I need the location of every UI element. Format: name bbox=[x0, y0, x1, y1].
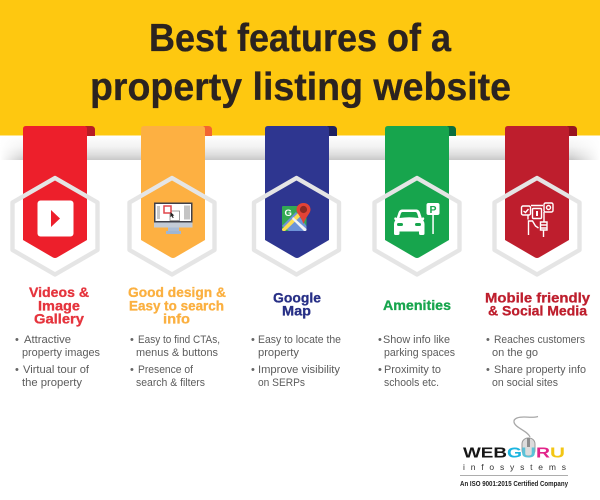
heading: videos: Image bbox=[38, 298, 80, 314]
bullet list: videos: property images bbox=[22, 347, 100, 359]
bullet list: google map: • bbox=[251, 364, 255, 376]
bullet list: good design: search & filters bbox=[136, 377, 205, 389]
ribbon: red bbox=[23, 126, 95, 258]
hexagon outline bbox=[254, 178, 339, 274]
bullet list: google map: property bbox=[258, 347, 300, 359]
panel: videos and image gallery bbox=[12, 126, 100, 389]
bullet list: google map: Easy to locate the bbox=[258, 334, 341, 346]
hexagon outline bbox=[374, 178, 460, 274]
wordmark: R bbox=[536, 444, 550, 462]
heading: amenities: Amenities bbox=[383, 297, 451, 313]
bullet list: amenities: • bbox=[378, 334, 382, 346]
bullet list: google map: • bbox=[251, 334, 255, 346]
icon: video play bbox=[38, 200, 74, 236]
bullet list: mobile friendly: Reaches customers bbox=[494, 334, 585, 346]
bullet list: mobile friendly: Share property info bbox=[494, 364, 586, 376]
heading: mobile friendly bbox=[485, 290, 590, 318]
panel: good design and easy search bbox=[128, 126, 226, 389]
bullet list: good design: • bbox=[130, 364, 134, 376]
tagline: infosystems bbox=[463, 462, 566, 472]
bullet list: videos: the property bbox=[22, 377, 83, 389]
bullet list: mobile friendly: on the go bbox=[492, 347, 538, 359]
bullet list: good design: Presence of bbox=[138, 364, 194, 376]
bullet list: google map bbox=[251, 334, 341, 389]
title bbox=[90, 17, 511, 109]
heading: videos: Gallery bbox=[34, 310, 84, 326]
heading: good design: Good design & bbox=[128, 284, 226, 300]
heading: good design: Easy to search bbox=[129, 298, 224, 314]
bullet list: amenities: Show info like bbox=[383, 334, 450, 346]
panel: google map bbox=[251, 126, 341, 389]
header band bbox=[0, 0, 600, 160]
bullet list: amenities: Proximity to bbox=[384, 364, 441, 376]
bullet list: videos bbox=[15, 334, 100, 389]
icon: computer mouse bbox=[514, 416, 538, 456]
ribbon: crimson bbox=[505, 126, 577, 258]
panel: amenities bbox=[374, 126, 460, 389]
icon: car and parking sign bbox=[394, 203, 440, 235]
ribbon: green bbox=[385, 126, 456, 258]
bullet list: google map: Improve visibility bbox=[258, 364, 341, 376]
certification note: An ISO 9001:2015 Certified Company bbox=[460, 479, 569, 488]
heading: videos: Videos & bbox=[29, 284, 89, 300]
bullet list: mobile friendly bbox=[486, 334, 586, 389]
heading: good design bbox=[128, 284, 226, 326]
bullet list: mobile friendly: on social sites bbox=[492, 377, 558, 389]
icon: google maps: G bbox=[284, 208, 292, 219]
heading: good design: info bbox=[163, 310, 190, 326]
bullet list: mobile friendly: • bbox=[486, 334, 490, 346]
heading: google map: Google bbox=[273, 290, 321, 306]
bullet list: amenities: • bbox=[378, 364, 382, 376]
bullet list: videos: • bbox=[15, 334, 19, 346]
wordmark: U bbox=[550, 444, 565, 462]
bullet list: videos: • bbox=[15, 364, 19, 376]
ribbon: blue bbox=[265, 126, 337, 258]
title: property listing website bbox=[90, 66, 511, 109]
hexagon outline bbox=[130, 178, 214, 274]
heading: google map bbox=[273, 290, 321, 318]
wordmark: U bbox=[521, 444, 536, 462]
bullet list: good design: Easy to find CTAs, bbox=[138, 334, 220, 346]
icon: car and parking sign: P bbox=[430, 204, 437, 216]
bullet list: good design bbox=[130, 334, 220, 389]
bullet list: videos: Virtual tour of bbox=[23, 364, 90, 376]
icon: hand holding phone with social icons bbox=[522, 203, 553, 237]
heading: google map: Map bbox=[282, 302, 311, 318]
heading: mobile friendly: Mobile friendly bbox=[485, 290, 590, 306]
panel: mobile friendly and social media bbox=[485, 126, 590, 389]
title: Best features of a bbox=[149, 17, 452, 60]
bullet list: amenities: schools etc. bbox=[384, 377, 439, 389]
hexagon outline bbox=[494, 178, 580, 274]
wordmark bbox=[463, 444, 565, 462]
wordmark: G bbox=[507, 444, 522, 462]
bullet list: mobile friendly: • bbox=[486, 364, 490, 376]
ribbon: orange bbox=[141, 126, 212, 258]
icon: desktop monitor bbox=[154, 202, 192, 234]
bullet list: amenities: parking spaces bbox=[384, 347, 455, 359]
bullet list: google map: on SERPs bbox=[258, 377, 305, 389]
hexagon outline bbox=[12, 178, 98, 274]
logo: webguru infosystems bbox=[460, 416, 569, 488]
bullet list: good design: • bbox=[130, 334, 134, 346]
icon: google maps bbox=[282, 203, 310, 231]
heading: mobile friendly: & Social Media bbox=[488, 302, 587, 318]
wordmark: WEB bbox=[463, 444, 507, 462]
bullet list: amenities bbox=[378, 334, 455, 389]
heading: videos bbox=[29, 284, 89, 326]
bullet list: videos: Attractive bbox=[24, 334, 71, 346]
bullet list: good design: menus & buttons bbox=[136, 347, 218, 359]
